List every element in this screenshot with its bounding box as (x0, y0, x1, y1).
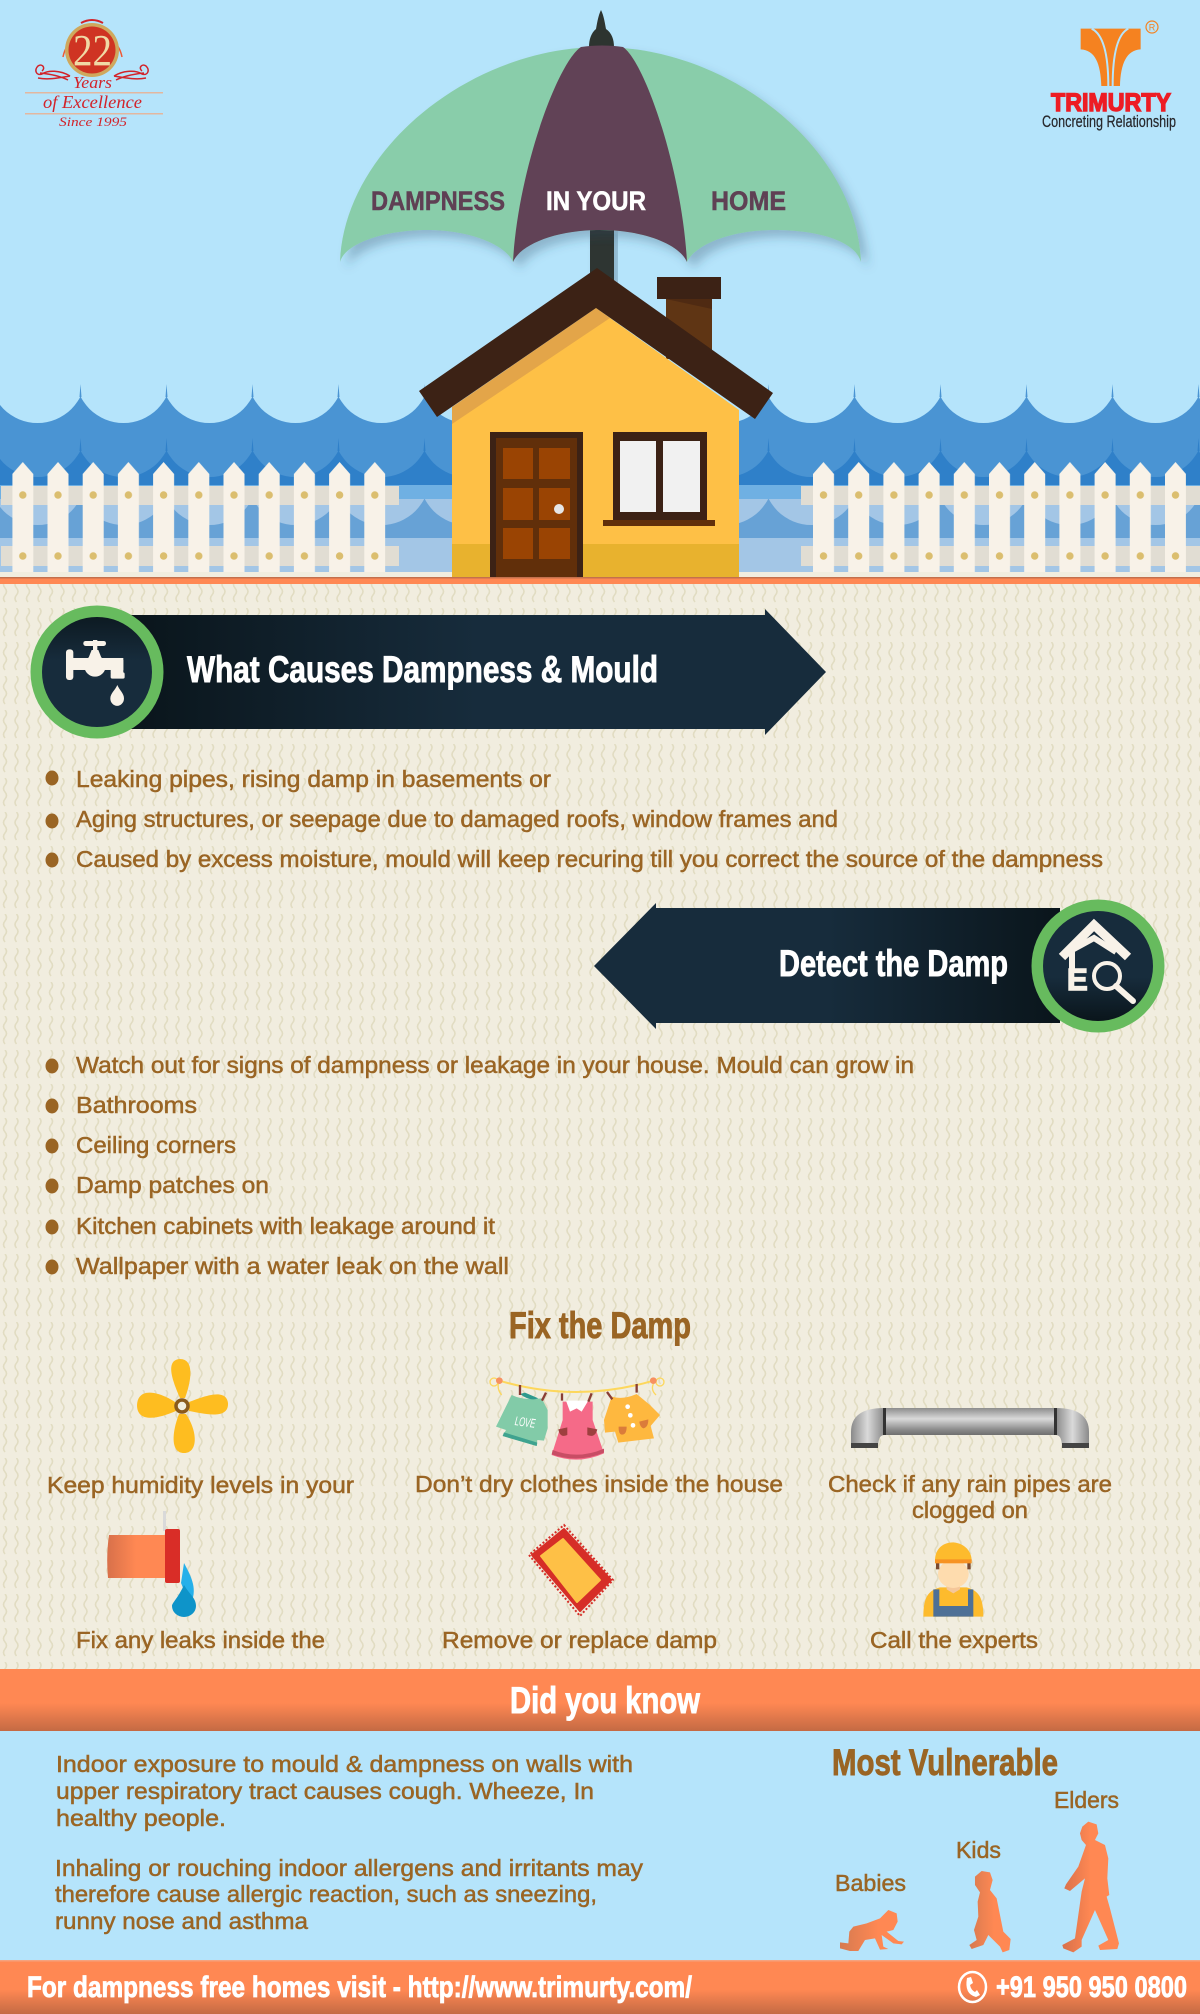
section banner: what causes dampness and mould (30, 606, 826, 738)
roof (419, 268, 773, 419)
banner heading: What Causes Dampness & Mould (187, 649, 658, 690)
tip text: clogged on (912, 1497, 1028, 1523)
paragraph 2: Inhaling or rouching indoor allergens and irritants may (55, 1855, 644, 1881)
paragraph 2: therefore cause allergic reaction, such as sneezing, (55, 1881, 597, 1907)
tip text: Check if any rain pipes are (828, 1471, 1112, 1497)
umbrella title (371, 186, 786, 216)
cause 1: Leaking pipes, rising damp in basements or (76, 766, 551, 792)
item 4: Damp patches on (76, 1172, 269, 1198)
item 5: Kitchen cabinets with leakage around it (76, 1213, 496, 1239)
panel: did you know details (0, 1731, 1200, 1960)
paragraph 1: healthy people. (56, 1805, 226, 1831)
cause 3: Caused by excess moisture, mould will keep recuring till you correct the source of the dampness (76, 846, 1103, 872)
tip text: Keep humidity levels in your (47, 1472, 354, 1498)
icon: elder silhouette (1062, 1822, 1119, 1952)
tip: leaks (76, 1511, 325, 1653)
item 2: Bathrooms (76, 1092, 197, 1118)
umbrella canopy (340, 47, 861, 262)
elders: Elders (1054, 1787, 1119, 1813)
tip: experts (870, 1542, 1038, 1653)
tip: damp carpet (442, 1525, 717, 1653)
kids: Kids (956, 1837, 1001, 1863)
paragraph 2: runny nose and asthma (55, 1908, 308, 1934)
logo: 22 years of excellence (25, 20, 163, 129)
elders (1054, 1787, 1119, 1952)
icon: phone (959, 1972, 986, 2002)
tip text: Don’t dry clothes inside the house (415, 1471, 783, 1497)
logo: trimurty: TRIMURTY (1051, 89, 1171, 117)
footer link text: For dampness free homes visit - http://www.trimurty.com/ (27, 1971, 693, 2004)
sky (0, 0, 1200, 572)
list: where to look (46, 1052, 914, 1279)
icon: fan (137, 1359, 228, 1453)
icon: worker (923, 1542, 983, 1617)
tip: humidity (47, 1359, 354, 1498)
band heading: Did you know (510, 1680, 700, 1721)
icon: leaking pipe (107, 1511, 196, 1617)
icon: pipe (851, 1408, 1089, 1448)
flood water waves (0, 384, 1200, 572)
item 6: Wallpaper with a water leak on the wall (76, 1253, 509, 1279)
item 3: Ceiling corners (76, 1132, 236, 1158)
tip text: Fix any leaks inside the (76, 1627, 325, 1653)
paragraph 1 (56, 1751, 633, 1831)
paragraph 1: upper respiratory tract causes cough. Wheeze, In (56, 1778, 594, 1804)
icon: faucet (30, 606, 164, 738)
umbrella title: HOME (711, 186, 786, 216)
kids (956, 1837, 1011, 1952)
logo: 22 years of excellence: 22 (73, 26, 112, 75)
icon: baby silhouette (840, 1910, 904, 1951)
tip: clothes (415, 1377, 783, 1497)
item 1: Watch out for signs of dampness or leakage in your house. Mould can grow in (76, 1052, 914, 1078)
chimney (657, 277, 721, 359)
paragraph 2 (55, 1855, 644, 1934)
arrow banner (130, 609, 826, 735)
header illustration panel (0, 0, 1200, 584)
tip text: Remove or replace damp (442, 1627, 717, 1653)
babies: Babies (835, 1870, 906, 1896)
logo: trimurty (1042, 21, 1176, 131)
logo: trimurty: R (1149, 22, 1156, 32)
section: fix the damp (47, 1305, 1112, 1653)
logo: 22 years of excellence: of Excellence (43, 92, 142, 112)
icon: kid silhouette (969, 1871, 1011, 1952)
icon: clothes line (490, 1377, 664, 1460)
icon: house with magnifier (1032, 900, 1164, 1032)
tip: rain pipes (828, 1408, 1112, 1523)
heading: Fix the Damp (509, 1305, 691, 1346)
umbrella centre panel (513, 46, 687, 262)
tip text: Call the experts (870, 1627, 1038, 1653)
umbrella pole (589, 10, 614, 295)
logo: 22 years of excellence: Years (73, 73, 112, 92)
icon: rug (529, 1525, 613, 1616)
tip text (828, 1471, 1112, 1523)
list: causes (46, 766, 1103, 872)
arrow banner (594, 903, 1060, 1029)
right picket fence (801, 462, 1200, 577)
icon: clothes line: LOVE (514, 1414, 537, 1431)
house (419, 268, 773, 577)
paragraph 1: Indoor exposure to mould & dampness on walls with (56, 1751, 633, 1777)
left picket fence (1, 462, 399, 577)
door (490, 432, 583, 577)
house wall (452, 308, 739, 577)
babies (835, 1870, 906, 1951)
ground strip (0, 572, 1200, 584)
window (603, 432, 715, 526)
section banner: detect the damp (594, 900, 1164, 1032)
icon: house with magnifier: E (1067, 962, 1088, 997)
band: did you know (0, 1669, 1200, 1731)
footer band (0, 1960, 1200, 2014)
umbrella (340, 10, 861, 295)
logo: 22 years of excellence: Since 1995 (59, 114, 128, 129)
banner heading: Detect the Damp (779, 943, 1008, 984)
umbrella title: IN YOUR (546, 186, 646, 216)
most vulnerable heading: Most Vulnerable (832, 1742, 1058, 1783)
cause 2: Aging structures, or seepage due to damaged roofs, window frames and (76, 806, 838, 832)
umbrella title: DAMPNESS (371, 186, 505, 216)
